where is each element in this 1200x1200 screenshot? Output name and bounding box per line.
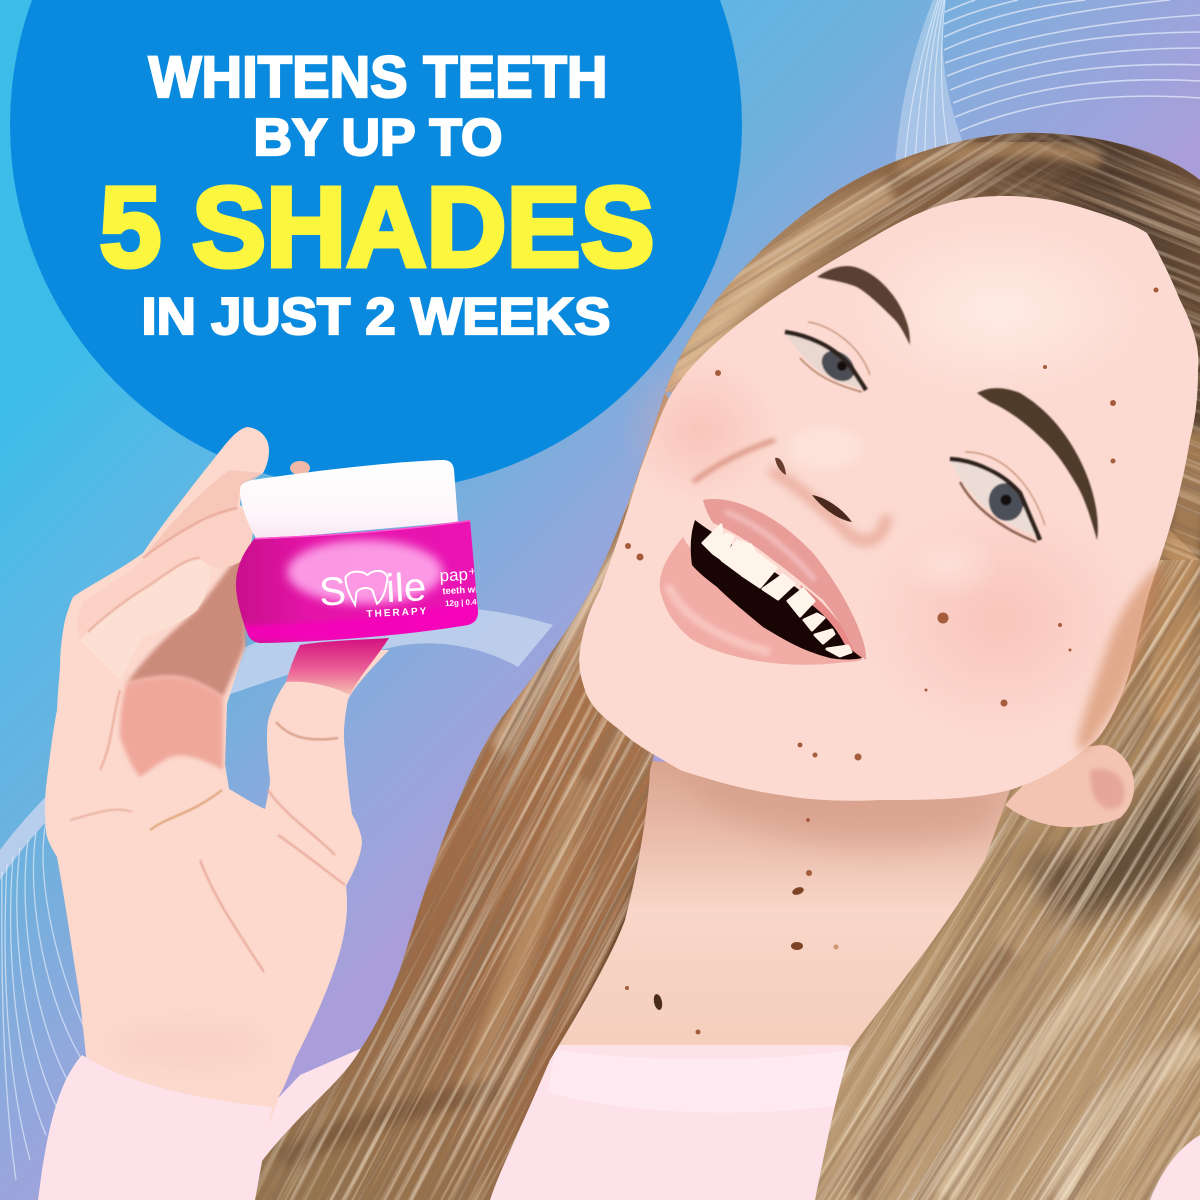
product weight: 12g | 0.4oz	[445, 597, 486, 608]
upper lip shine	[725, 512, 815, 580]
headline line: in just 2 weeks: IN JUST 2 WEEKS	[142, 288, 610, 346]
hair top right: textures	[1100, 200, 1101, 201]
forehead highlight	[850, 220, 1150, 400]
headline line: by up to: BY UP TO	[254, 109, 502, 167]
blue circle	[10, 0, 742, 491]
jar labels	[322, 568, 478, 618]
hair left: dark inner edge	[529, 812, 646, 1107]
teeth	[703, 525, 851, 656]
lower lip	[660, 537, 862, 665]
ear inner shading	[1090, 769, 1124, 809]
background wave lines: lower left	[2, 822, 90, 1180]
hair right: dark under ear	[1020, 720, 1200, 925]
product name: pap⁺ pow	[439, 562, 514, 585]
eyebrow right	[977, 388, 1098, 540]
thumb tip reflection	[286, 638, 389, 695]
background wave lines: top right	[944, 0, 1200, 131]
lower lip shine	[668, 585, 770, 652]
mouth cavity	[691, 520, 862, 660]
jar rim	[255, 520, 470, 538]
logo tooth	[345, 570, 389, 605]
ring finger	[80, 558, 210, 680]
jar bottom glow	[240, 600, 480, 640]
hair crown and right	[650, 120, 1200, 1200]
hair left	[255, 392, 668, 1200]
product description: teeth whitening	[442, 583, 513, 597]
sweater collar	[548, 1050, 848, 1113]
neck	[550, 760, 1045, 1060]
cheek blush	[860, 500, 1140, 740]
hair left: light texture	[500, 799, 501, 800]
sleeve cuff	[38, 1055, 272, 1200]
background wave: top right lattice band	[895, 0, 962, 167]
nose highlight	[789, 428, 861, 468]
finger creases	[70, 508, 345, 972]
hair left: dark texture	[500, 799, 501, 800]
hair top left: dark texture	[850, 259, 851, 261]
eyebrow left	[817, 266, 910, 345]
hair top right: light texture	[1100, 200, 1101, 201]
index finger shade	[143, 470, 263, 558]
hair right: dark strand	[860, 950, 1010, 1200]
face	[579, 196, 1198, 801]
nostril left	[775, 458, 786, 475]
nose shadow	[770, 470, 887, 541]
logo subline: THERAPY	[366, 606, 429, 620]
hair top band	[665, 133, 1200, 560]
woman	[200, 120, 1200, 1200]
neck shadow	[680, 770, 1000, 847]
logo letter S: S	[318, 569, 347, 615]
upper lip	[703, 499, 866, 660]
hair lower: dark texture	[1050, 949, 1051, 951]
cheek blush left	[620, 355, 780, 505]
headline	[100, 45, 654, 346]
mouth	[660, 499, 866, 665]
hair right: light strand low	[1060, 1040, 1200, 1200]
headline line: 5 shades: 5 SHADES	[100, 164, 654, 290]
hair top: gold centre strand	[900, 149, 1100, 170]
middle finger	[78, 508, 253, 640]
jar shading and text	[244, 520, 478, 642]
nostril right	[812, 495, 852, 522]
nose	[770, 428, 887, 541]
palm shadow lower	[120, 677, 223, 777]
face edge shadow	[1077, 560, 1165, 750]
ear	[1005, 745, 1134, 827]
hair left: dark low tone	[280, 1090, 500, 1160]
jar	[236, 460, 478, 643]
sweater	[258, 1045, 1200, 1200]
wrist shadow	[110, 1023, 270, 1067]
jar lid	[240, 460, 458, 540]
hair top left: textures	[850, 259, 851, 261]
hair right: light strand	[950, 920, 1190, 1200]
palm shadow between fingers	[127, 540, 250, 697]
logo letters ile: ile	[385, 565, 427, 611]
hair top right: dark texture	[1100, 200, 1101, 201]
hair left: pale top strand	[500, 560, 615, 750]
headline line: whitens teeth: WHITENS TEETH	[148, 45, 608, 110]
gum	[800, 585, 862, 658]
thumb peek behind lid	[290, 461, 310, 475]
jar highlight	[287, 540, 443, 604]
eye left	[785, 322, 870, 392]
cheek highlight	[900, 530, 1000, 600]
hand	[45, 427, 389, 1128]
smile crease	[693, 440, 775, 482]
jar base	[236, 520, 478, 643]
eye right	[950, 452, 1045, 542]
hair top: pale left strand	[680, 190, 890, 380]
moles and freckles	[625, 288, 1158, 1034]
hair top left: light texture	[850, 259, 851, 261]
hair right: side gold	[1160, 430, 1195, 720]
hair left: golden strand	[470, 780, 585, 1100]
background wave: lower swoosh band	[0, 607, 553, 880]
hair lower: textures	[1050, 949, 1051, 951]
hand and jar	[38, 427, 516, 1200]
hair lower: light texture	[1050, 949, 1051, 951]
